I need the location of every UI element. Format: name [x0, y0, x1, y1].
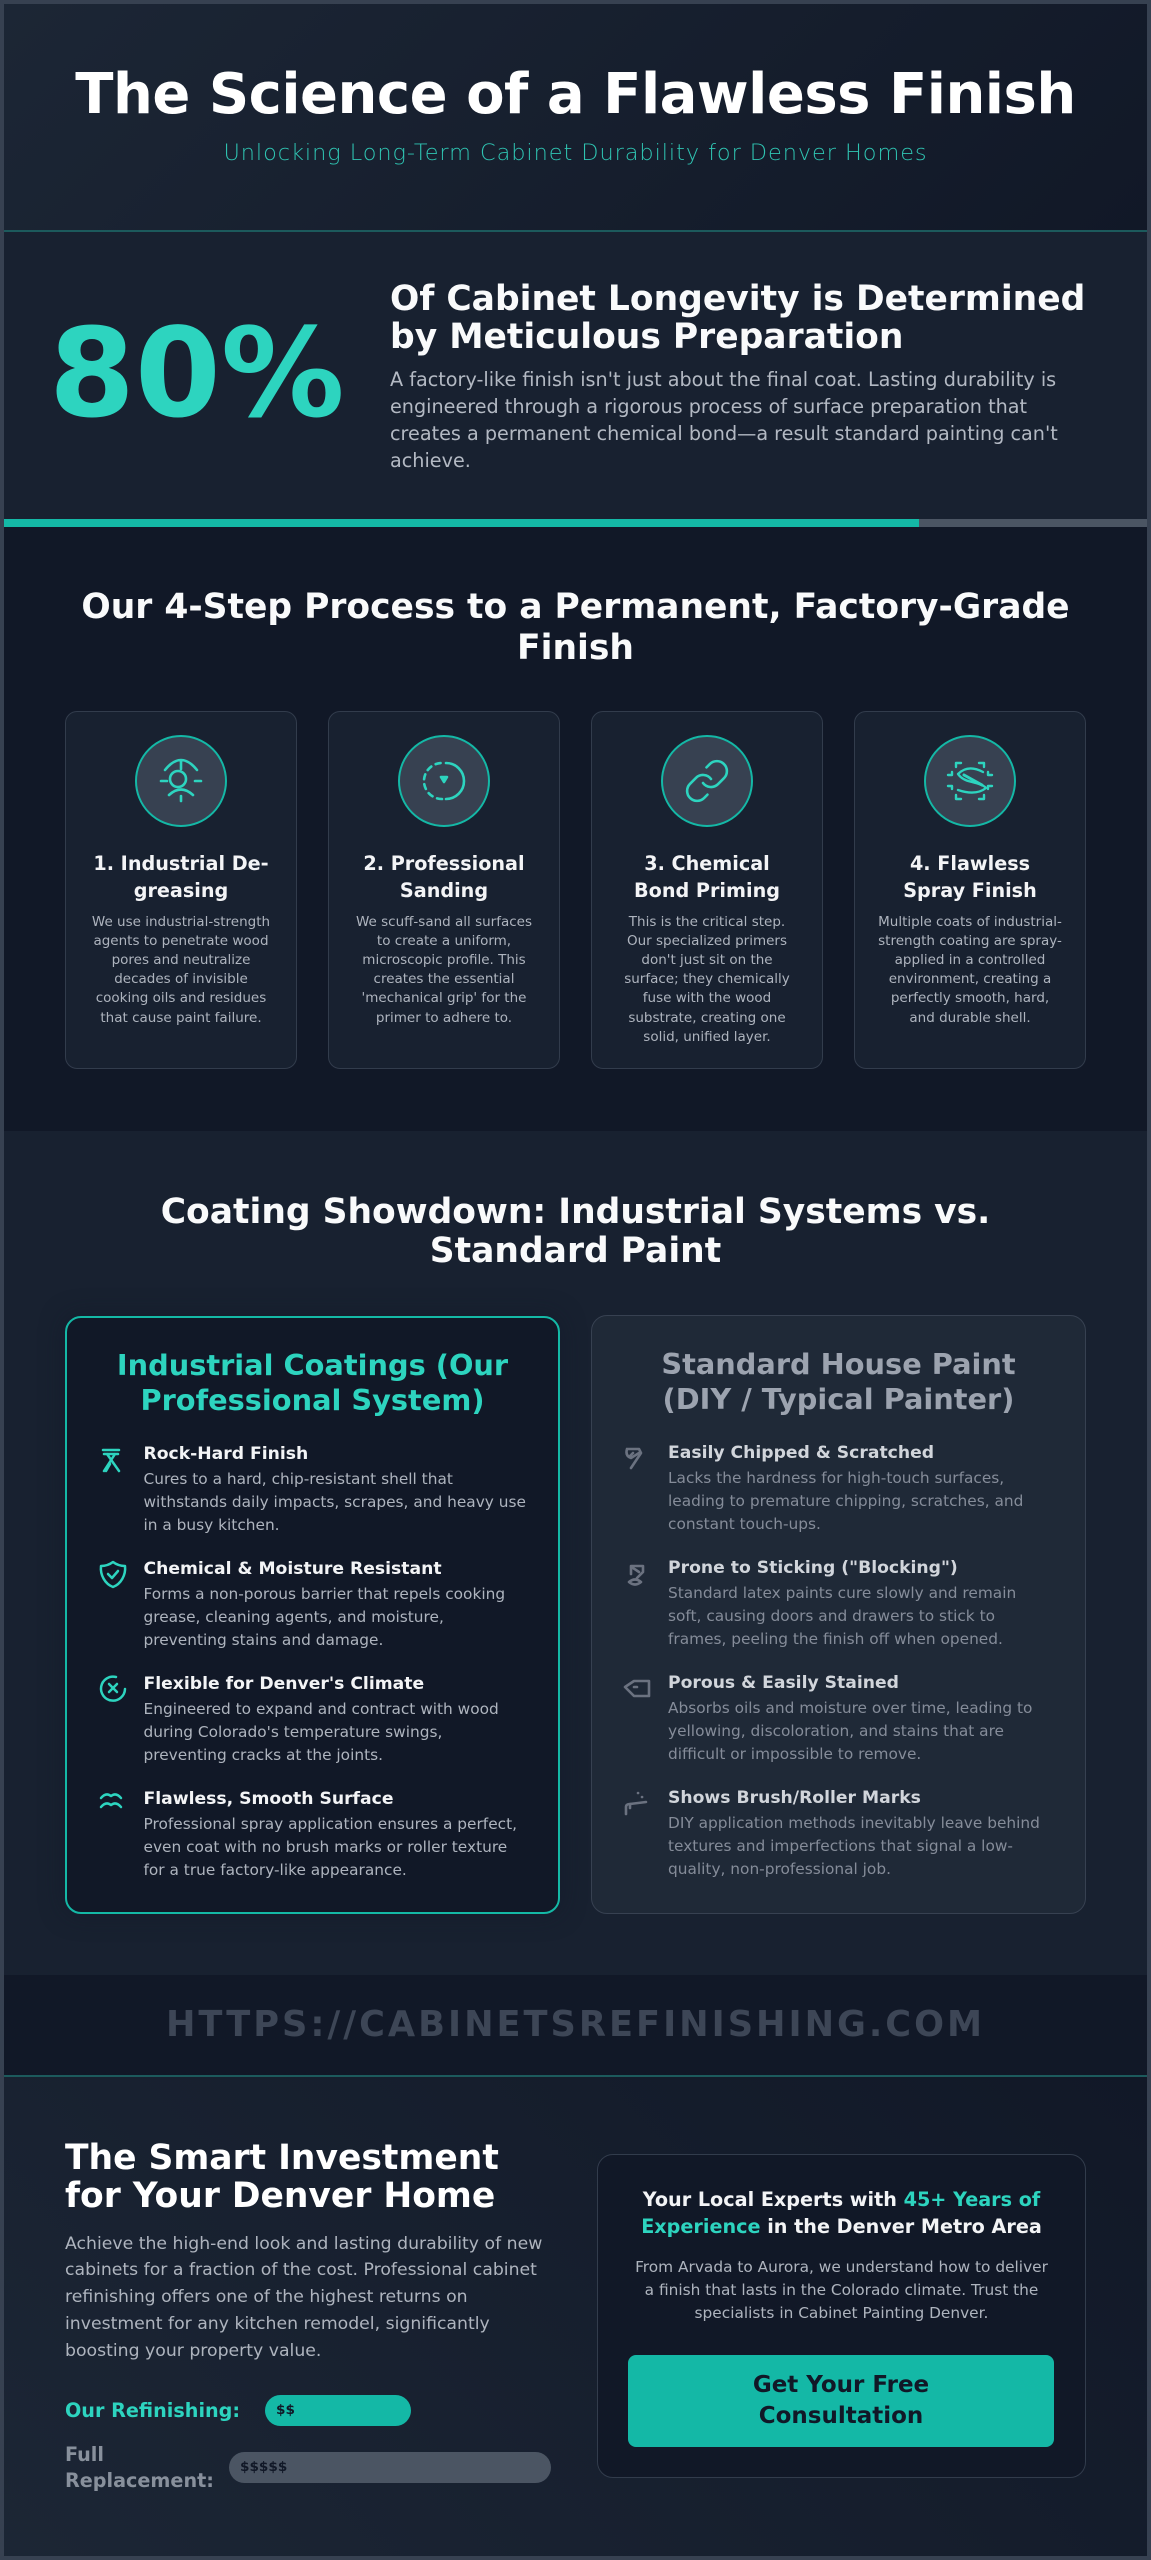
icon: waves [100, 1793, 122, 1808]
item body: stained [668, 1698, 1032, 1763]
heading: investment: for Your Denver Home [65, 2176, 495, 2216]
step 2 body [356, 914, 532, 1026]
heading: process: Our 4-Step Process to a Permanent, Factory-Grade [81, 587, 1070, 627]
item body: chipped [668, 1468, 1023, 1533]
item body: brush marks [668, 1814, 1040, 1878]
item body: chipped: constant touch-ups. [668, 1515, 821, 1533]
label: full replacement [65, 2442, 214, 2492]
step circle 2 [398, 735, 490, 827]
step 3 body: substrate, creating one [628, 1010, 786, 1026]
heading: investment [65, 2138, 499, 2216]
item: rock-hard finish: Rock-Hard Finish [144, 1444, 308, 1464]
stat body [390, 368, 1058, 472]
icon: sanding [422, 762, 466, 800]
bar: our refinishing [265, 2395, 411, 2426]
step card 3 [591, 711, 823, 1069]
step circle 1 [135, 735, 227, 827]
step 4 body: applied in a controlled [895, 952, 1045, 968]
item body: rock-hard: in a busy kitchen. [144, 1516, 280, 1534]
stat body: A factory-like finish isn't just about the final coat. Lasting durability is [390, 368, 1056, 391]
step 1 body: We use industrial-strength [92, 914, 270, 930]
step 3 body: This is the critical step. [629, 914, 785, 930]
text: investment body: cabinets for a fraction of the cost. Professional cabinet [65, 2260, 537, 2280]
item body: flexible: Engineered to expand and contract with wood [144, 1700, 499, 1718]
step 4 body: environment, creating a [889, 971, 1051, 987]
item body: rock-hard: withstands daily impacts, scrapes, and heavy use [144, 1493, 526, 1511]
panel: standard paint [591, 1315, 1086, 1914]
step 2 title [363, 852, 525, 902]
heading: showdown: Coating Showdown: Industrial Systems vs. [161, 1192, 990, 1232]
item: brush marks: Shows Brush/Roller Marks [668, 1788, 921, 1808]
step 2 body: primer to adhere to. [376, 1010, 512, 1026]
button: consultation [628, 2355, 1054, 2447]
step 3 body: Our specialized primers [627, 933, 787, 949]
step 1 body: agents to penetrate wood [93, 933, 269, 949]
icon: flexible [100, 1675, 126, 1702]
url band [4, 1975, 1147, 2077]
panel: investment [4, 2077, 1147, 2556]
step 2 body: We scuff-sand all surfaces [356, 914, 532, 930]
item: flexible: Flexible for Denver's Climate [144, 1674, 424, 1694]
item: sticking: Prone to Sticking ("Blocking") [668, 1558, 958, 1578]
heading: showdown [161, 1192, 990, 1271]
step card 2 [328, 711, 560, 1069]
button: consultation: Consultation [759, 2403, 923, 2429]
step 3 title [634, 852, 780, 902]
item body: stained: yellowing, discoloration, and stains that are [668, 1722, 1004, 1740]
step 1 body: decades of invisible [114, 971, 248, 987]
step 3 body: don't just sit on the [641, 952, 773, 968]
icon: chipped [625, 1448, 642, 1470]
progress fill [4, 519, 919, 527]
step 1 body: cooking oils and residues [96, 990, 266, 1006]
item: chipped: Easily Chipped & Scratched [668, 1442, 934, 1462]
item body: sticking [668, 1584, 1016, 1648]
label: full replacement: Full [65, 2442, 104, 2466]
step 4 body: and durable shell. [909, 1010, 1031, 1026]
heading: local experts [641, 2188, 1042, 2238]
step 1 title: greasing [134, 879, 228, 902]
item body: brush marks: textures and imperfections that signal a low- [668, 1837, 1013, 1855]
text: investment body: boosting your property value. [65, 2341, 321, 2361]
bar: our refinishing: $$ [276, 2402, 295, 2418]
text: investment body: refinishing offers one of the highest returns on [65, 2287, 468, 2307]
item body: brush marks: DIY application methods inevitably leave behind [668, 1814, 1040, 1832]
step 4 title: 4. Flawless [910, 852, 1030, 875]
step 2 body: creates the essential [374, 971, 514, 987]
icon: rock-hard [102, 1448, 120, 1472]
panel title: industrial coatings [117, 1348, 508, 1416]
step 4 title: Spray Finish [903, 879, 1037, 902]
icon: stained [624, 1680, 650, 1698]
item body: chemical: Forms a non-porous barrier that repels cooking [144, 1584, 505, 1602]
item body: flawless: for a true factory-like appearance. [144, 1861, 407, 1879]
text: investment body: investment for any kitchen remodel, significantly [65, 2314, 490, 2334]
label: full replacement: Replacement: [65, 2469, 214, 2492]
step 1 title: 1. Industrial De- [93, 852, 269, 875]
panel: local experts [597, 2154, 1086, 2478]
item body: stained: difficult or impossible to remove. [668, 1745, 921, 1763]
item body: sticking: Standard latex paints cure slowly and remain [668, 1584, 1016, 1602]
item body: flexible [144, 1700, 499, 1764]
heading: local experts: Your Local Experts with 45+ Years of [643, 2188, 1040, 2211]
text: investment body: Achieve the high-end look and lasting durability of new [65, 2234, 542, 2254]
big stat: 80% [49, 302, 345, 446]
label: our refinishing: Our Refinishing: [65, 2398, 240, 2422]
step 2 body: to create a uniform, [377, 933, 511, 949]
url text: HTTPS://CABINETSREFINISHING.COM [166, 2004, 985, 2045]
button: consultation: Get Your Free [753, 2372, 929, 2398]
item body: brush marks: quality, non-professional job. [668, 1860, 891, 1878]
icon: shield [100, 1560, 126, 1588]
step 4 body: perfectly smooth, hard, [891, 990, 1049, 1006]
step 2 body: microscopic profile. This [362, 952, 526, 968]
step 3 body: surface; they chemically [624, 971, 790, 987]
progress bar: 80 percent [4, 519, 1147, 527]
item body: rock-hard [144, 1470, 526, 1534]
step 1 body [92, 914, 270, 1026]
step 2 title: 2. Professional [363, 852, 525, 875]
panel title: standard paint [661, 1346, 1016, 1416]
subtitle: Unlocking Long-Term Cabinet Durability for Denver Homes [223, 140, 928, 166]
text: local experts body: From Arvada to Aurora, we understand how to deliver [635, 2258, 1048, 2276]
header panel [4, 4, 1147, 232]
title: The Science of a Flawless Finish [75, 62, 1076, 127]
icon: sticking [628, 1564, 644, 1586]
step card 4 [854, 711, 1086, 1069]
item body: stained: Absorbs oils and moisture over time, leading to [668, 1698, 1032, 1716]
text: investment body [65, 2234, 542, 2361]
panel: coating showdown [4, 1131, 1147, 1975]
step 3 title: Bond Priming [634, 879, 780, 902]
step 2 title: Sanding [400, 879, 488, 902]
panel title: industrial coatings: Industrial Coatings (Our [117, 1348, 508, 1382]
step 4 body: Multiple coats of industrial- [878, 914, 1062, 930]
item body: chemical: preventing stains and damage. [144, 1631, 383, 1649]
icon: spray finish [946, 762, 994, 800]
step 1 body: pores and neutralize [112, 952, 250, 968]
item body: flexible: during Colorado's temperature swings, [144, 1723, 442, 1741]
bar: full replacement [229, 2452, 551, 2483]
heading: local experts: Experience in the Denver Metro Area [641, 2215, 1042, 2238]
step 3 body: fuse with the wood [643, 990, 771, 1006]
bar: full replacement: $$$$$ [240, 2459, 287, 2475]
step 1 body: that cause paint failure. [100, 1010, 262, 1026]
step 1 title [93, 852, 269, 902]
item body: flexible: preventing cracks at the joints. [144, 1746, 383, 1764]
stat heading: by Meticulous Preparation [390, 317, 903, 357]
step circle 4 [924, 735, 1016, 827]
stat body: creates a permanent chemical bond—a result standard painting can't [390, 422, 1058, 445]
item body: sticking: soft, causing doors and drawers to stick to [668, 1607, 995, 1625]
item body: flawless: even coat with no brush marks or roller texture [144, 1838, 507, 1856]
step 4 body: strength coating are spray- [878, 933, 1062, 949]
icon: chemical bond [686, 760, 728, 802]
item: stained: Porous & Easily Stained [668, 1672, 899, 1692]
text: local experts body [635, 2258, 1048, 2322]
item: chemical and moisture: Chemical & Moisture Resistant [144, 1558, 442, 1578]
heading: showdown: Standard Paint [430, 1231, 721, 1271]
step 3 body: solid, unified layer. [643, 1029, 771, 1045]
item body: chipped: leading to premature chipping, scratches, and [668, 1492, 1023, 1510]
stat body: achieve. [390, 449, 471, 472]
step 4 title [903, 852, 1037, 902]
item body: sticking: frames, peeling the finish off when opened. [668, 1630, 1003, 1648]
icon: brush marks [624, 1792, 648, 1816]
item body: rock-hard: Cures to a hard, chip-resistant shell that [144, 1470, 453, 1488]
step 3 body [624, 914, 790, 1045]
panel: 4-step process [4, 527, 1147, 1131]
panel: industrial coatings [65, 1316, 560, 1914]
step 3 title: 3. Chemical [644, 852, 770, 875]
item body: flawless [144, 1814, 517, 1879]
item: flawless: Flawless, Smooth Surface [144, 1788, 393, 1808]
item body: chemical [144, 1584, 505, 1649]
step 4 body [878, 914, 1062, 1026]
panel: 80 percent statistic [4, 232, 1147, 519]
step circle 3 [661, 735, 753, 827]
stat body: engineered through a rigorous process of surface preparation that [390, 395, 1027, 418]
panel title: industrial coatings: Professional System) [140, 1382, 485, 1416]
item body: chemical: grease, cleaning agents, and moisture, [144, 1608, 444, 1626]
panel title: standard paint: (DIY / Typical Painter) [663, 1382, 1014, 1416]
stat heading [390, 278, 1085, 357]
heading: process: Finish [517, 628, 634, 668]
step card 1 [65, 711, 297, 1069]
icon: degreasing [160, 758, 202, 802]
heading: investment: The Smart Investment [65, 2138, 499, 2178]
text: local experts body: a finish that lasts in the Colorado climate. Trust the [645, 2281, 1038, 2299]
panel title: standard paint: Standard House Paint [661, 1346, 1016, 1380]
heading: process [81, 587, 1070, 668]
step 2 body: 'mechanical grip' for the [362, 990, 526, 1006]
item body: flawless: Professional spray application ensures a perfect, [144, 1814, 517, 1832]
stat heading: Of Cabinet Longevity is Determined [390, 278, 1085, 318]
text: local experts body: specialists in Cabinet Painting Denver. [695, 2304, 988, 2322]
item body: chipped: Lacks the hardness for high-touch surfaces, [668, 1468, 1004, 1486]
